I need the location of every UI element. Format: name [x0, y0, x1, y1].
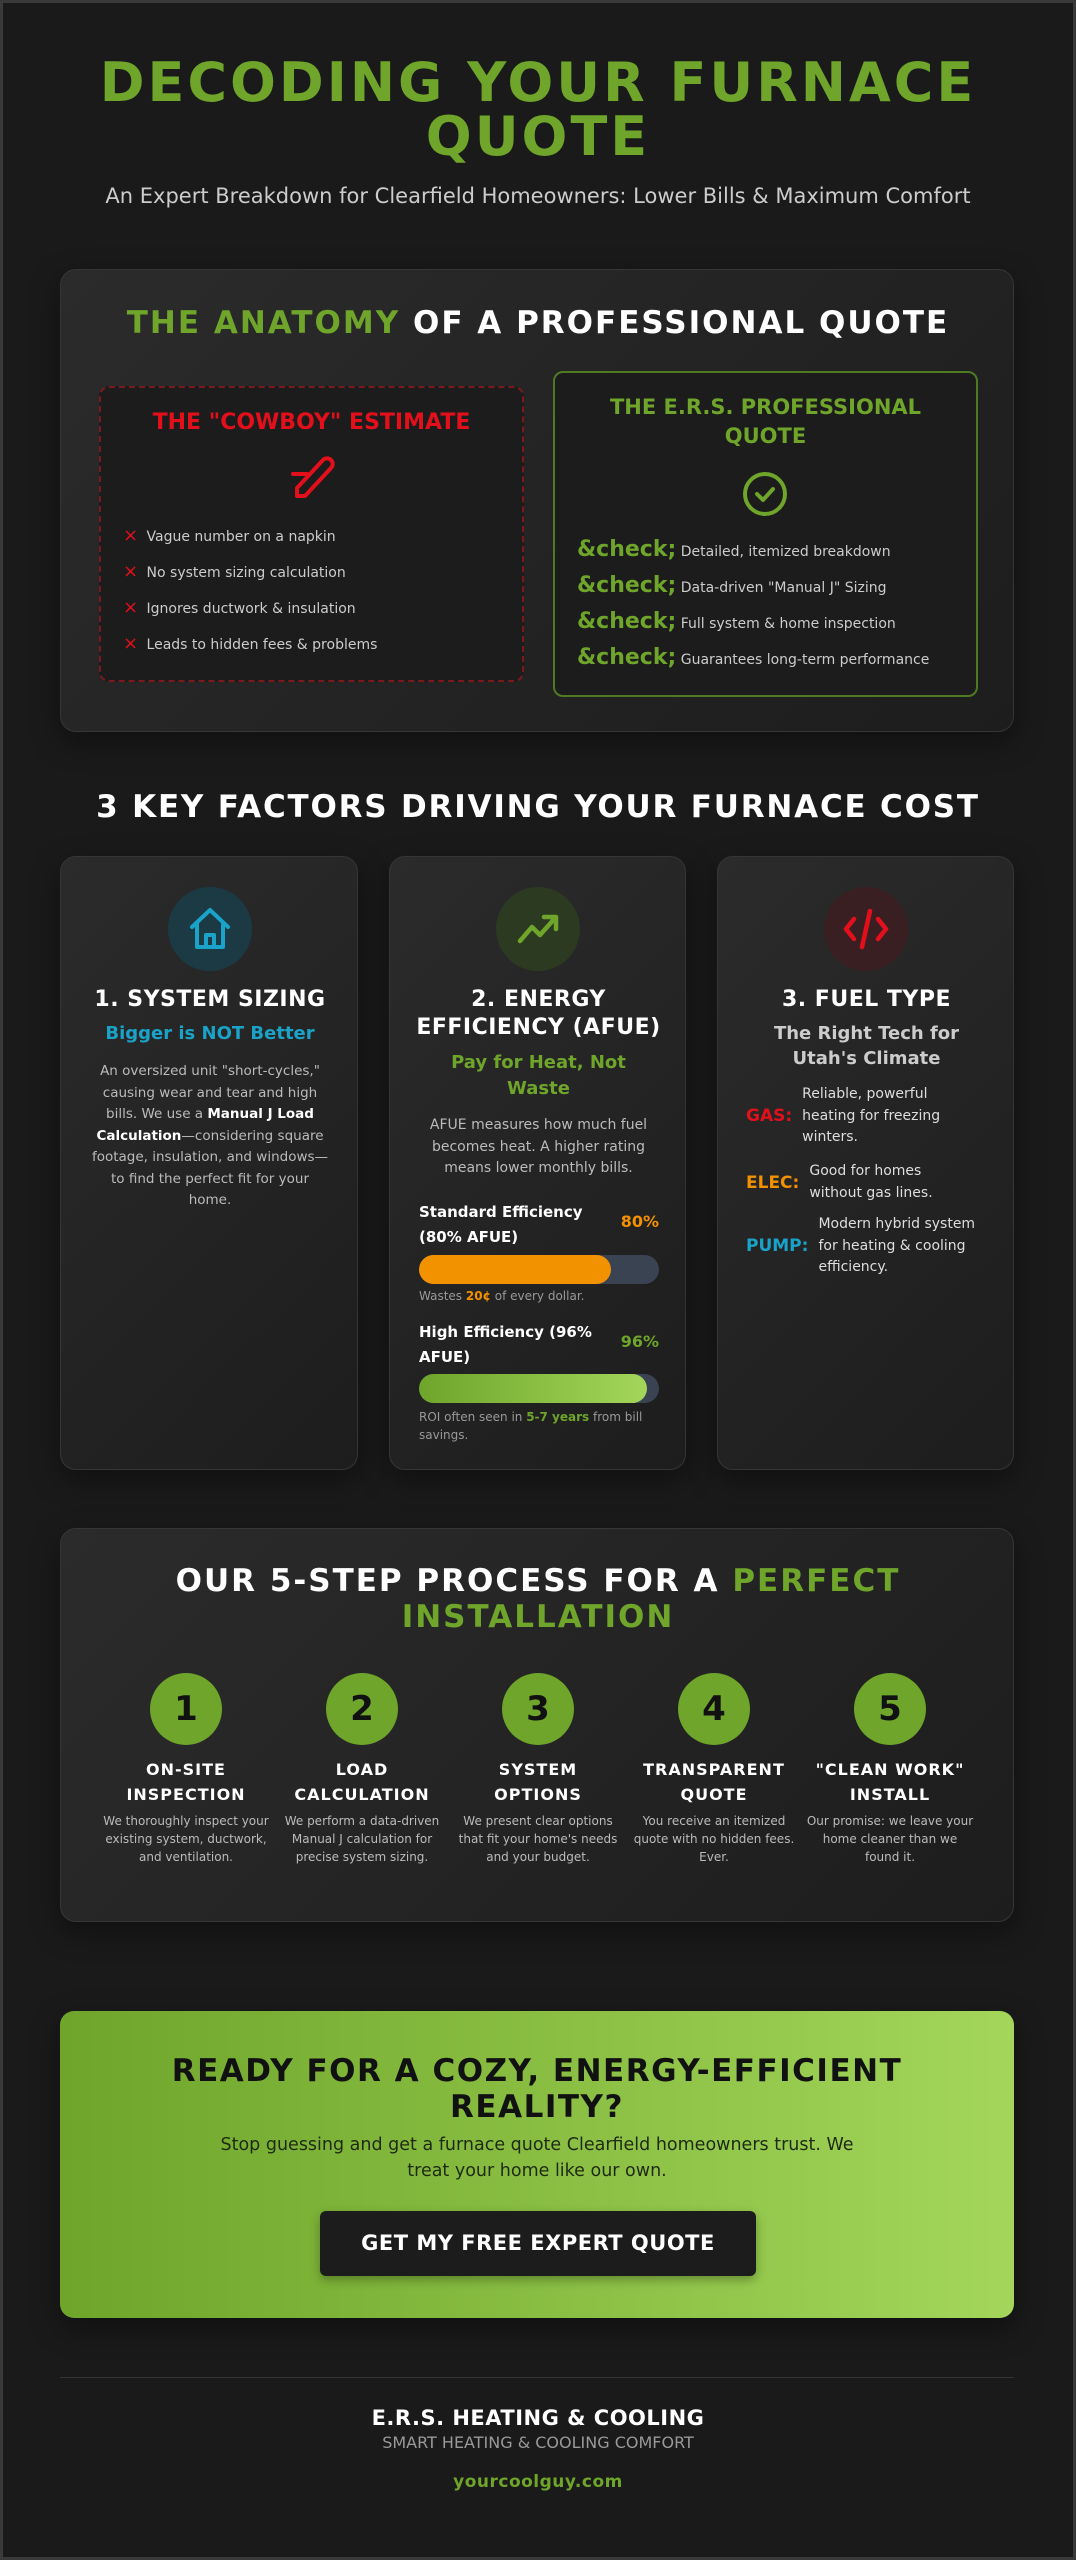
chart: high efficiency: ROI often seen in 5-7 years from bill savings. [419, 1410, 642, 1442]
chart: standard efficiency: Standard Efficiency (80% AFUE) [419, 1203, 583, 1246]
box: ERS professional quote: &check; Data-driven "Manual J" Sizing [577, 573, 887, 598]
step 2: 2 [350, 1689, 374, 1729]
CTA heading: READY FOR A COZY, ENERGY-EFFICIENT [172, 2053, 902, 2089]
card: system sizing [60, 856, 358, 1470]
cowboy title: THE "COWBOY" ESTIMATE [153, 410, 470, 435]
footer [372, 2406, 704, 2492]
step 5: "CLEAN WORK" INSTALL [816, 1760, 964, 1804]
step 4: TRANSPARENT QUOTE [643, 1760, 785, 1804]
card1 title: 1. SYSTEM SIZING [94, 987, 326, 1012]
step 4: You receive an itemized quote with no hidden fees. Ever. [634, 1814, 794, 1864]
CTA button: GET MY FREE EXPERT QUOTE [361, 2231, 715, 2255]
heading: 5-step: INSTALLATION [402, 1599, 674, 1635]
heading: 5-step [176, 1563, 900, 1635]
card2 title [416, 987, 661, 1040]
step 4 [634, 1673, 794, 1864]
step 2 [285, 1673, 439, 1864]
step 5: Our promise: we leave your home cleaner than we found it. [807, 1814, 973, 1864]
box: cowboy estimate: × No system sizing calculation [123, 561, 346, 582]
step 1: 1 [174, 1689, 198, 1729]
footer: yourcoolguy.com [453, 2472, 623, 2492]
chart: high efficiency: High Efficiency (96% AFUE) [419, 1323, 592, 1366]
CTA button [320, 2211, 756, 2276]
step 3: SYSTEM [499, 1760, 577, 1779]
step 3: We present clear options that fit your home's needs and your budget. [459, 1814, 617, 1864]
step 3: OPTIONS [494, 1785, 582, 1804]
box: ERS professional quote [553, 371, 978, 697]
box: cowboy estimate [99, 386, 524, 682]
fuel list: Reliable, powerful heating for freezing winters. [802, 1086, 940, 1145]
card: fuel type [717, 856, 1014, 1470]
box: cowboy estimate: × Leads to hidden fees & problems [123, 633, 377, 654]
chart: standard efficiency [419, 1203, 659, 1303]
icon: house [168, 887, 252, 971]
card2 subtitle: Pay for Heat, Not Waste [451, 1052, 626, 1099]
ERS title: QUOTE [725, 424, 806, 448]
step 2: We perform a data-driven Manual J calculation for precise system sizing. [285, 1814, 439, 1864]
icon: code brackets [824, 887, 908, 971]
fuel list: GAS: [746, 1106, 792, 1126]
card1 subtitle: Bigger is NOT Better [105, 1023, 315, 1044]
fuel list: Good for homes without gas lines. [809, 1163, 933, 1200]
box: ERS professional quote: &check; Guarantees long-term performance [577, 645, 929, 670]
card2 title: EFFICIENCY (AFUE) [416, 1015, 661, 1040]
panel: 5-step process [60, 1528, 1014, 1922]
title [100, 51, 976, 168]
box: ERS professional quote: &check; Full system & home inspection [577, 609, 896, 634]
chart: high efficiency [419, 1323, 659, 1442]
CTA text: Stop guessing and get a furnace quote Clearfield homeowners trust. We treat your home like our own. [220, 2135, 854, 2181]
box: cowboy estimate: × Vague number on a napkin [123, 525, 336, 546]
step 5 [807, 1673, 974, 1864]
fuel list [746, 1086, 975, 1275]
card1 body: An oversized unit "short-cycles," causing wear and tear and high bills. We use a Manual J Load Calculation—considering square footage, insulation, and windows—to find the perfect fit for your home. [92, 1063, 328, 1208]
step 1: ON-SITE INSPECTION [126, 1760, 246, 1804]
title: DECODING YOUR FURNACE [100, 51, 976, 114]
step 3 [458, 1673, 617, 1864]
step 2: LOAD CALCULATION [294, 1760, 430, 1804]
footer: SMART HEATING & COOLING COMFORT [382, 2433, 694, 2452]
fuel list: Modern hybrid system for heating & cooling efficiency. [818, 1216, 975, 1275]
box: ERS professional quote: &check; Detailed, itemized breakdown [577, 537, 891, 562]
title: QUOTE [426, 105, 650, 168]
step 1 [103, 1673, 269, 1864]
footer: E.R.S. HEATING & COOLING [372, 2406, 704, 2430]
step 5: 5 [878, 1689, 902, 1729]
CTA heading: REALITY? [450, 2089, 624, 2125]
ERS title [610, 395, 921, 448]
card3 title: 3. FUEL TYPE [782, 987, 951, 1012]
cowboy list [123, 525, 377, 654]
chart: high efficiency: 96% [621, 1332, 659, 1351]
step 3: 3 [526, 1689, 550, 1729]
chart: standard efficiency: Wastes 20¢ of every dollar. [419, 1289, 584, 1303]
card2 title: 2. ENERGY [471, 987, 606, 1012]
card3 subtitle: The Right Tech for Utah's Climate [774, 1023, 959, 1069]
icon: pencil [291, 456, 335, 498]
heading: anatomy: THE ANATOMY OF A PROFESSIONAL QUOTE [127, 305, 949, 341]
icon: trend arrow [496, 887, 580, 971]
step 4: 4 [702, 1689, 726, 1729]
CTA heading [172, 2053, 902, 2125]
ERS list [577, 537, 929, 670]
subtitle: An Expert Breakdown for Clearfield Homeowners: Lower Bills & Maximum Comfort [105, 184, 971, 208]
card2 body: AFUE measures how much fuel becomes heat. A higher rating means lower monthly bills. [430, 1117, 647, 1176]
box: cowboy estimate: × Ignores ductwork & insulation [123, 597, 356, 618]
ERS title: THE E.R.S. PROFESSIONAL [610, 395, 921, 419]
heading: 3 key factors: 3 KEY FACTORS DRIVING YOUR FURNACE COST [96, 789, 980, 825]
chart: standard efficiency: 80% [621, 1212, 659, 1231]
icon: check circle [743, 472, 787, 516]
heading: 5-step: OUR 5-STEP PROCESS FOR A PERFECT [176, 1563, 900, 1599]
fuel list: PUMP: [746, 1236, 808, 1256]
panel: anatomy of a quote [60, 269, 1014, 732]
step 1: We thoroughly inspect your existing system, ductwork, and ventilation. [103, 1814, 269, 1864]
fuel list: ELEC: [746, 1172, 799, 1192]
CTA panel [60, 2011, 1014, 2318]
card: energy efficiency [389, 856, 686, 1470]
